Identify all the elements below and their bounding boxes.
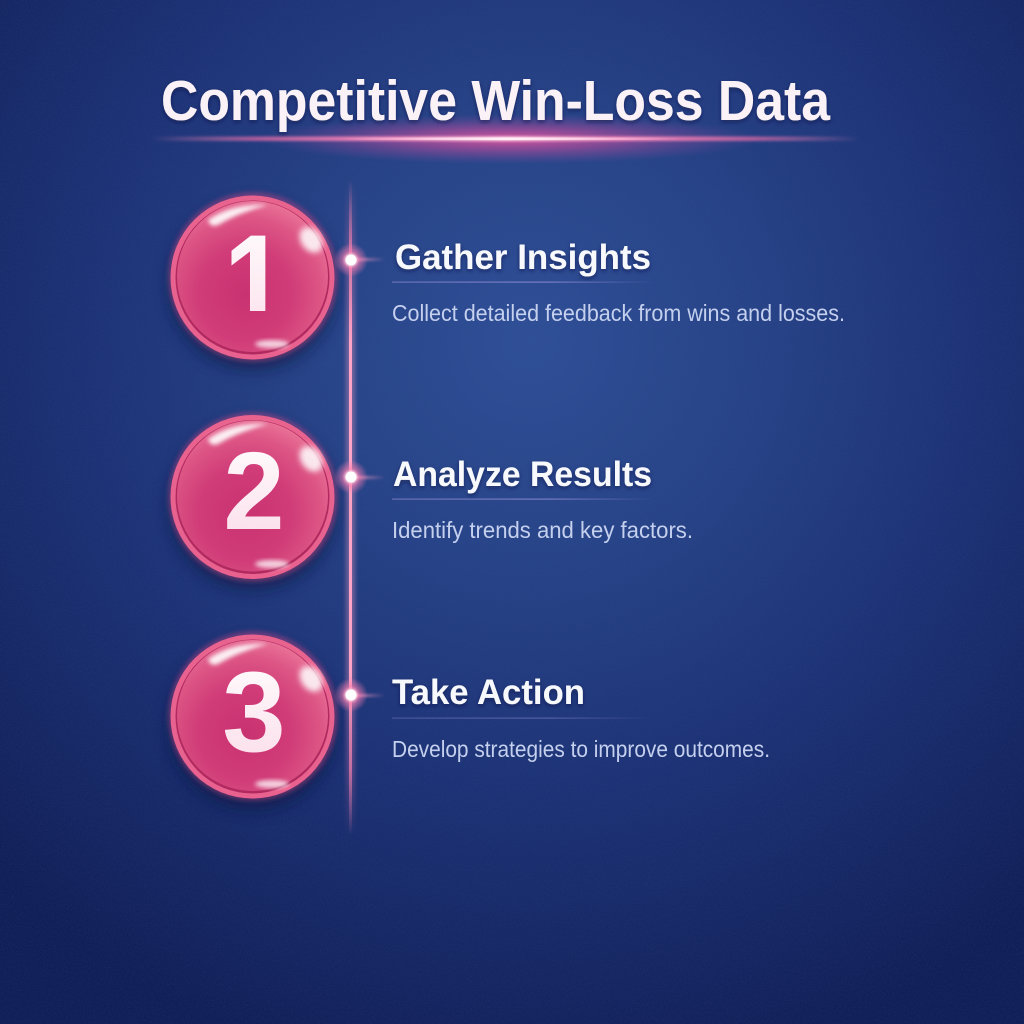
badge 2 [168,412,338,590]
timeline vertical line [346,180,355,835]
step 1 [168,192,845,370]
node 3 [334,678,385,712]
step 3 [168,631,770,810]
heading: Analyze Results: Analyze Results [393,455,652,494]
heading: Take Action: Take Action [392,673,585,712]
title: Competitive Win-Loss Data [161,69,831,133]
step 2 [168,412,693,590]
numeral 2: 2 [223,430,285,553]
node 2 [334,460,385,494]
description: Develop strategies to improve outcomes. [392,736,770,762]
description: Collect detailed feedback from wins and losses. [392,300,845,326]
node 1 [334,243,385,277]
heading rule [392,282,654,283]
badge 1 [168,192,338,370]
heading: Gather Insights: Gather Insights [395,238,651,277]
numeral 3: 3 [222,649,286,776]
heading rule [392,718,654,719]
heading rule [392,498,654,500]
numeral 1: 1 [224,207,286,359]
badge 3 [168,631,338,810]
description: Identify trends and key factors. [392,517,693,543]
title underline glow [150,114,860,164]
